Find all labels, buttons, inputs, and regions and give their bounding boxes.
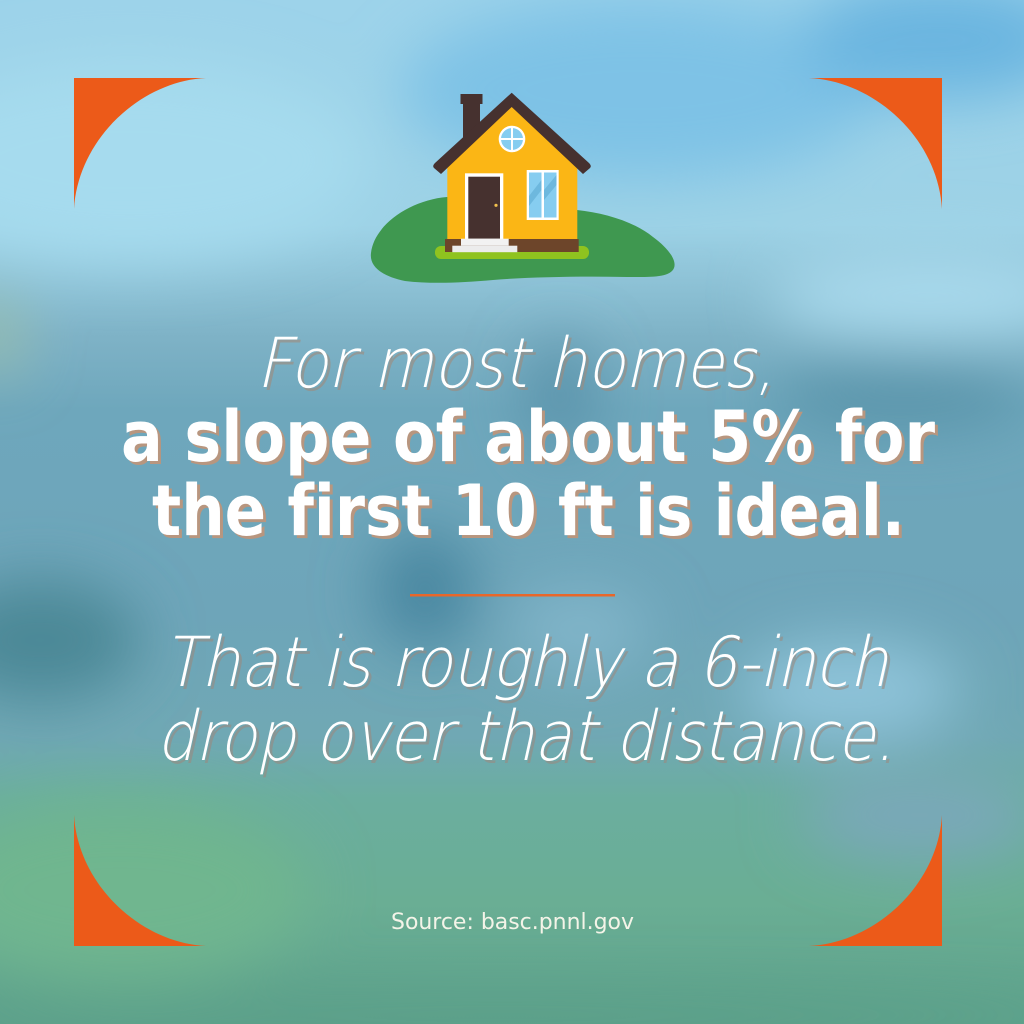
- subtext: That is roughly a 6-inch drop over that distance: That is roughly a 6-inch: [166, 626, 891, 706]
- heading line: For most homes: For most homes,: [256, 324, 775, 404]
- roof: [433, 93, 591, 174]
- corner: bottom right: [809, 815, 942, 946]
- chimney: [460, 94, 482, 145]
- wall: [447, 104, 577, 239]
- heading: a slope of about 5% for the first 10 ft is ideal: [121, 396, 938, 555]
- subtext: That is roughly a 6-inch drop over that distance: [156, 623, 897, 780]
- source: Source: basc.pnnl.gov: [391, 910, 634, 935]
- round window: [499, 126, 525, 152]
- corner: top right: [809, 78, 942, 209]
- corner: top left: [74, 78, 206, 209]
- steps: [452, 239, 517, 252]
- window: [527, 170, 559, 220]
- subtext: That is roughly a 6-inch drop over that distance: That is roughly a 6-inch: [163, 623, 888, 703]
- foundation: [445, 239, 579, 252]
- heading: a slope of about 5% for the first 10 ft is ideal: the first 10 ft is ideal.: [155, 473, 908, 555]
- heading: a slope of about 5% for the first 10 ft is ideal: the first 10 ft is ideal.: [152, 470, 905, 552]
- lawn: [371, 197, 675, 283]
- icon: house on a lawn: [371, 93, 675, 283]
- heading line: For most homes: For most homes,: [259, 327, 778, 407]
- subtext: That is roughly a 6-inch drop over that distance: drop over that distance.: [159, 700, 897, 780]
- subtext: That is roughly a 6-inch drop over that distance: drop over that distance.: [156, 697, 894, 777]
- heading: a slope of about 5% for the first 10 ft is ideal: a slope of about 5% for: [124, 399, 938, 481]
- corner: bottom left: [74, 815, 206, 946]
- divider: [410, 594, 615, 596]
- door: [465, 173, 503, 239]
- heading: a slope of about 5% for the first 10 ft is ideal: a slope of about 5% for: [121, 396, 935, 478]
- grass strip: [435, 246, 589, 259]
